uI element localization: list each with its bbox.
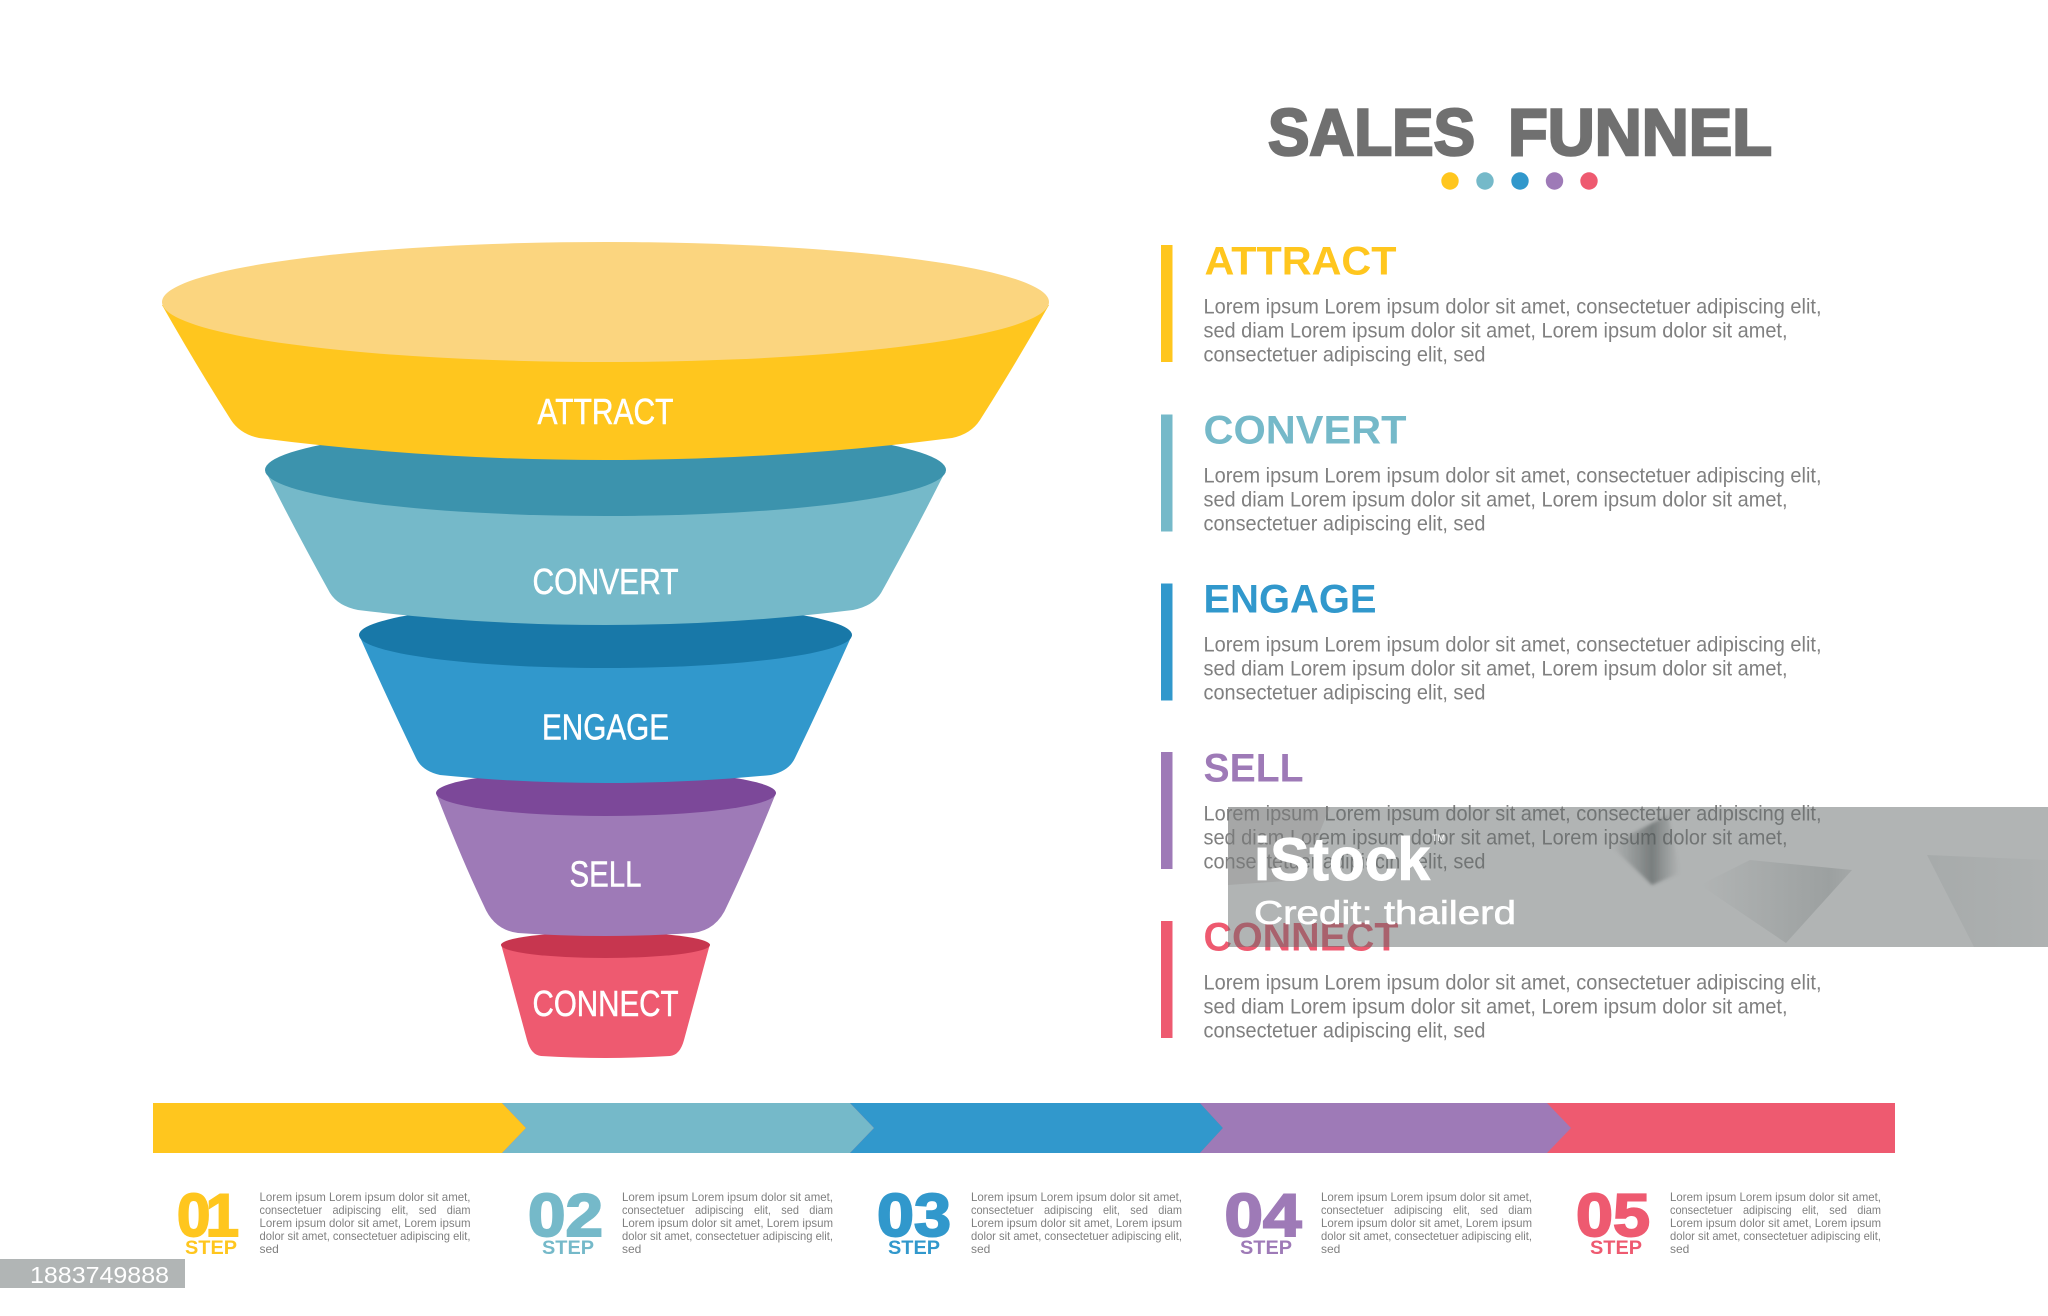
watermark banner: iStock credit <box>1228 807 2048 947</box>
funnel tier: connect <box>501 932 710 1058</box>
step 01: STEP <box>185 1238 237 1259</box>
title: Sales Funnel: SALES <box>1268 95 1475 169</box>
panel: convert description: consectetuer adipiscing elit, sed <box>1204 512 1486 536</box>
title colour dots <box>1441 172 1598 190</box>
panel: sell description <box>1161 746 1822 874</box>
step 03: STEP <box>888 1238 940 1259</box>
stock image id tag: 1883749888 <box>30 1262 169 1288</box>
step 01: consectetuer adipiscing elit, sed diam <box>260 1203 470 1217</box>
step 05: Lorem ipsum Lorem ipsum dolor sit amet, <box>1670 1190 1881 1204</box>
step 03: dolor sit amet, consectetuer adipiscing elit, <box>971 1229 1182 1243</box>
step 05: STEP <box>1590 1238 1642 1259</box>
chevron progress ribbon <box>153 1103 1895 1153</box>
step 02: Lorem ipsum Lorem ipsum dolor sit amet, <box>622 1190 833 1204</box>
panel: attract description: sed diam Lorem ipsum dolor sit amet, Lorem ipsum dolor sit amet, <box>1204 320 1788 342</box>
watermark trademark: TM <box>1432 833 1445 843</box>
step 01: dolor sit amet, consectetuer adipiscing elit, <box>260 1229 470 1243</box>
funnel chart <box>162 242 1049 1058</box>
panel: sell description: SELL <box>1204 746 1304 790</box>
step 05: consectetuer adipiscing elit, sed diam <box>1670 1203 1881 1217</box>
step 04 <box>1224 1182 1532 1259</box>
panel: convert description: Lorem ipsum Lorem ipsum dolor sit amet, consectetuer adipiscing elit, <box>1204 464 1822 488</box>
step 02 <box>528 1182 833 1259</box>
panel: engage description <box>1161 578 1822 704</box>
funnel tier: engage <box>359 602 852 783</box>
panel: engage description: sed diam Lorem ipsum dolor sit amet, Lorem ipsum dolor sit amet, <box>1204 658 1788 680</box>
step 04: Lorem ipsum Lorem ipsum dolor sit amet, <box>1321 1190 1532 1204</box>
panel: convert description <box>1161 408 1822 536</box>
funnel tier: sell <box>436 770 776 936</box>
step 04: consectetuer adipiscing elit, sed diam <box>1321 1203 1532 1217</box>
step 03: 03 <box>877 1182 951 1249</box>
funnel tier: connect: CONNECT <box>532 983 679 1024</box>
title: Sales Funnel <box>1268 95 1772 169</box>
funnel tier: sell: SELL <box>570 854 642 894</box>
panel: connect description: CONNECT <box>1204 916 1398 960</box>
step 03: Lorem ipsum Lorem ipsum dolor sit amet, <box>971 1190 1182 1204</box>
step 04: dolor sit amet, consectetuer adipiscing elit, <box>1321 1229 1532 1243</box>
panel: connect description: sed diam Lorem ipsum dolor sit amet, Lorem ipsum dolor sit amet, <box>1204 996 1788 1018</box>
panel: sell description: Lorem ipsum Lorem ipsum dolor sit amet, consectetuer adipiscing elit, <box>1204 802 1822 826</box>
panel: connect description: consectetuer adipiscing elit, sed <box>1204 1020 1486 1042</box>
panel: engage description: consectetuer adipiscing elit, sed <box>1204 682 1486 704</box>
step 05: Lorem ipsum dolor sit amet, Lorem ipsum <box>1670 1216 1881 1230</box>
stock image id tag <box>0 1259 185 1288</box>
panel: attract description: Lorem ipsum Lorem ipsum dolor sit amet, consectetuer adipiscing elit, <box>1204 296 1822 318</box>
watermark logo text: iStock <box>1254 826 1431 893</box>
step 04: 04 <box>1224 1182 1302 1249</box>
step 05: dolor sit amet, consectetuer adipiscing elit, <box>1670 1229 1881 1243</box>
panel: sell description: consectetuer adipiscing elit, sed <box>1204 850 1486 874</box>
step 01 <box>177 1182 470 1259</box>
step 02: dolor sit amet, consectetuer adipiscing elit, <box>622 1229 833 1243</box>
panel: connect description <box>1161 916 1822 1042</box>
funnel tier: attract <box>162 242 1049 460</box>
step 03 <box>877 1182 1182 1259</box>
step 05: sed <box>1670 1242 1689 1256</box>
watermark credit line: Credit: thailerd <box>1254 894 1516 931</box>
step 02: 02 <box>528 1182 603 1249</box>
funnel tier: attract: ATTRACT <box>538 391 674 432</box>
title: Sales Funnel: FUNNEL <box>1508 95 1772 169</box>
panel: engage description: Lorem ipsum Lorem ipsum dolor sit amet, consectetuer adipiscing elit, <box>1204 634 1822 656</box>
funnel tier: convert: CONVERT <box>532 561 679 602</box>
panel: convert description: CONVERT <box>1204 408 1406 452</box>
step 04: sed <box>1321 1242 1340 1256</box>
step 05 <box>1576 1182 1881 1259</box>
step 03: Lorem ipsum dolor sit amet, Lorem ipsum <box>971 1216 1182 1230</box>
step 04: Lorem ipsum dolor sit amet, Lorem ipsum <box>1321 1216 1532 1230</box>
panel: convert description: sed diam Lorem ipsum dolor sit amet, Lorem ipsum dolor sit amet, <box>1204 488 1788 512</box>
step 04: STEP <box>1240 1238 1292 1259</box>
panel: connect description: Lorem ipsum Lorem ipsum dolor sit amet, consectetuer adipiscing elit, <box>1204 972 1822 994</box>
step 01: 01 <box>177 1182 239 1249</box>
step 05: 05 <box>1576 1182 1650 1249</box>
step 02: consectetuer adipiscing elit, sed diam <box>622 1203 833 1217</box>
step 01: Lorem ipsum dolor sit amet, Lorem ipsum <box>260 1216 470 1230</box>
step 03: sed <box>971 1242 990 1256</box>
step 03: consectetuer adipiscing elit, sed diam <box>971 1203 1182 1217</box>
step 01: Lorem ipsum Lorem ipsum dolor sit amet, <box>260 1190 470 1204</box>
panel: attract description: consectetuer adipiscing elit, sed <box>1204 344 1486 366</box>
panel: attract description: ATTRACT <box>1204 240 1396 284</box>
step 02: Lorem ipsum dolor sit amet, Lorem ipsum <box>622 1216 833 1230</box>
panel: engage description: ENGAGE <box>1204 578 1376 622</box>
step 01: sed <box>260 1242 279 1256</box>
funnel tier: convert <box>265 424 946 625</box>
panel: attract description <box>1161 240 1822 366</box>
step 02: STEP <box>542 1238 594 1259</box>
step 02: sed <box>622 1242 641 1256</box>
funnel tier: engage: ENGAGE <box>542 706 669 748</box>
panel: sell description: sed diam Lorem ipsum dolor sit amet, Lorem ipsum dolor sit amet, <box>1204 826 1788 850</box>
